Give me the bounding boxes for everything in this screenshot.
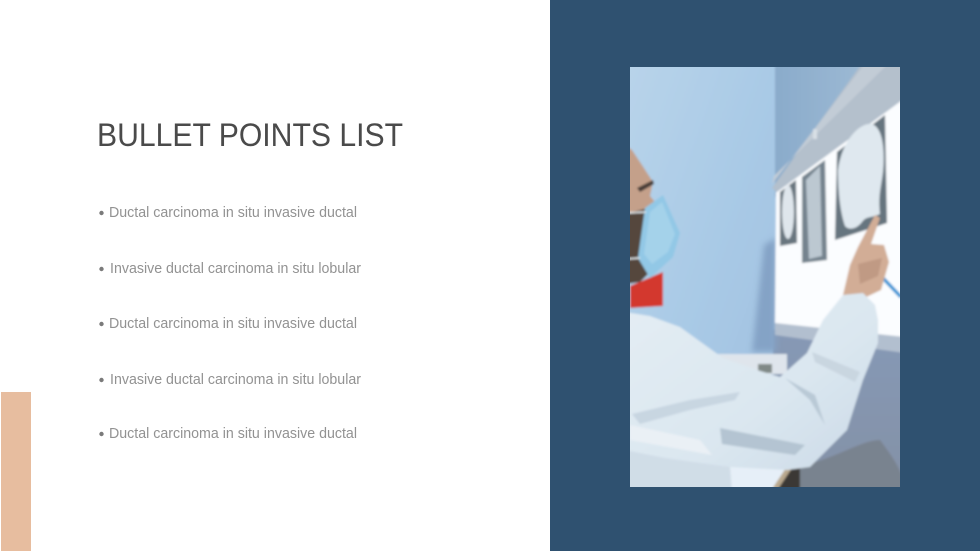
bullet item 1: Ductal carcinoma in situ invasive ductal bbox=[109, 204, 357, 221]
bullet list bbox=[99, 204, 361, 442]
bullet item 4: Invasive ductal carcinoma in situ lobular bbox=[110, 371, 361, 388]
red box bbox=[630, 272, 663, 308]
photo wall bbox=[630, 67, 778, 376]
eyebrow bbox=[637, 180, 654, 192]
rail clip bbox=[813, 129, 817, 139]
radiator bbox=[717, 354, 787, 374]
bullet item 2: Invasive ductal carcinoma in situ lobular bbox=[110, 260, 361, 277]
coat underside bbox=[630, 452, 710, 487]
skin bbox=[630, 147, 655, 214]
lightbox top rail bbox=[772, 62, 905, 192]
blue pen bbox=[881, 276, 901, 297]
lower cabinet shadow bbox=[799, 440, 900, 487]
lower gap bbox=[729, 466, 786, 487]
x-ray film: small bbox=[780, 180, 797, 246]
lightbox lower rail bbox=[775, 323, 905, 353]
bullet item 3: Ductal carcinoma in situ invasive ductal bbox=[109, 315, 357, 332]
surgical mask bbox=[638, 195, 680, 278]
coat folds bbox=[720, 428, 805, 455]
panel: navy right background bbox=[550, 0, 980, 551]
lightbox bbox=[775, 97, 905, 338]
title: BULLET POINTS LIST bbox=[97, 117, 403, 153]
hand bbox=[843, 215, 889, 299]
lower right wall bbox=[772, 334, 900, 474]
beard bbox=[630, 208, 649, 285]
bullet item 5: Ductal carcinoma in situ invasive ductal bbox=[109, 425, 357, 442]
x-ray film: skull bbox=[835, 115, 887, 240]
photo: doctor pointing at x-rays bbox=[625, 62, 905, 492]
upper right wall bbox=[775, 67, 861, 182]
dark furniture bbox=[777, 468, 802, 487]
accent bar: peach bbox=[1, 392, 31, 551]
wall shadow bbox=[752, 238, 776, 352]
lab coat bbox=[630, 292, 879, 472]
x-ray film: spine bbox=[802, 160, 827, 263]
